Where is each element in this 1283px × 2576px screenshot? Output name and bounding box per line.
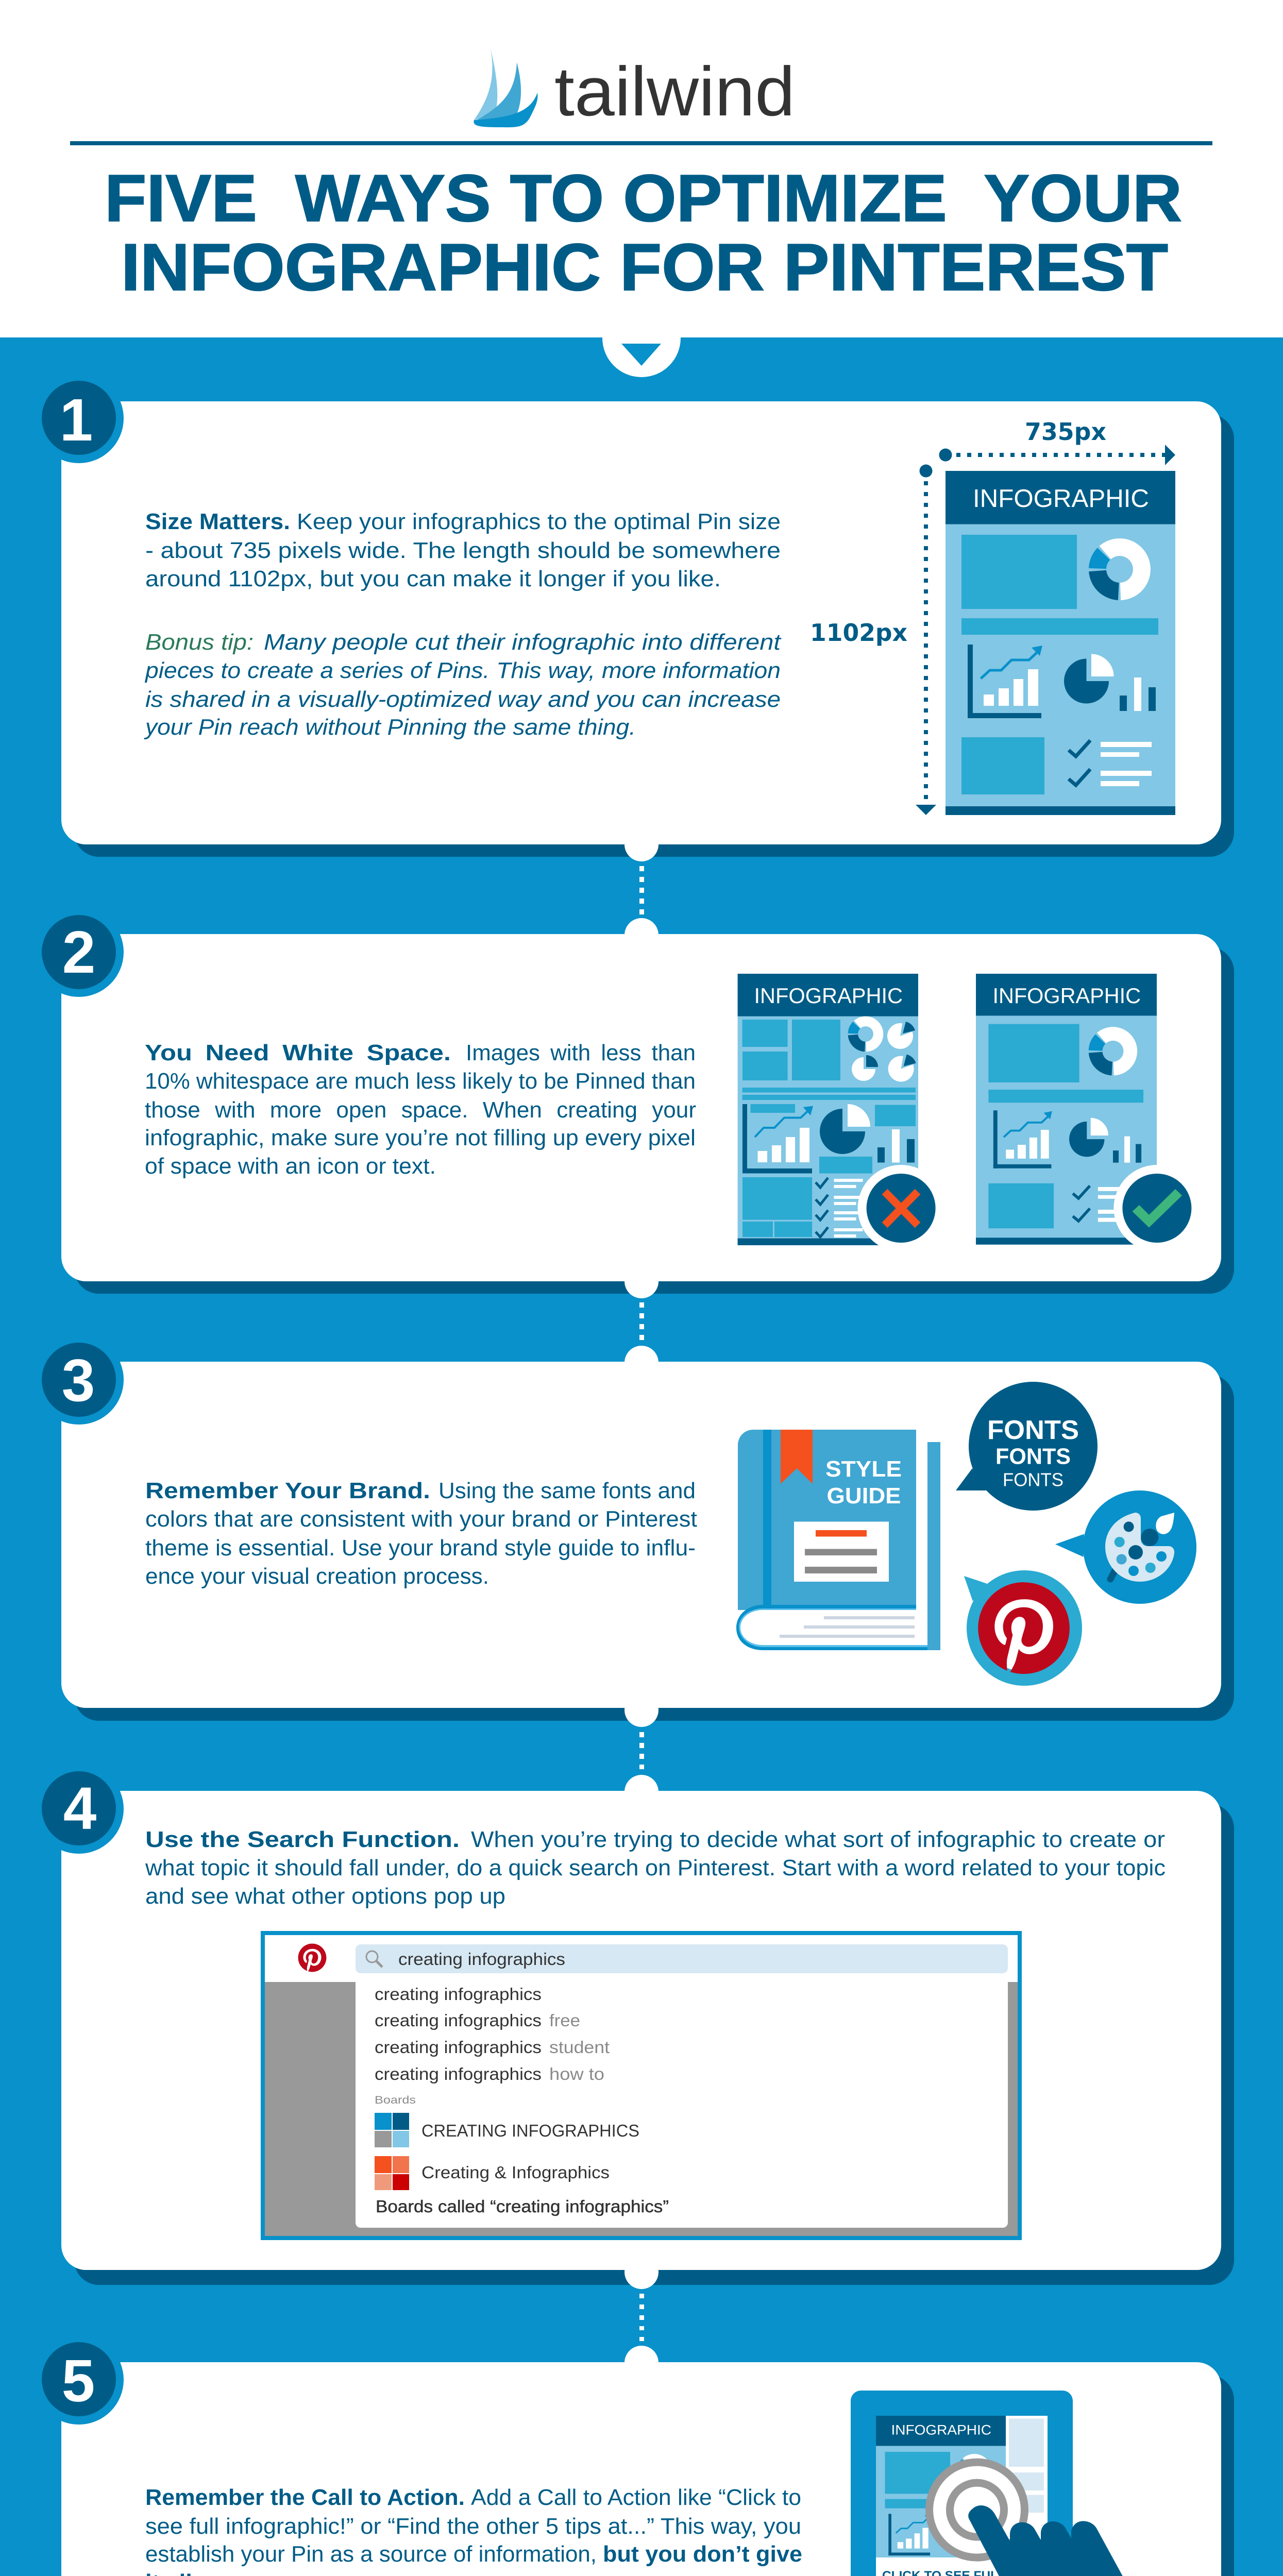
text: size matters: around 1102px, but you can make it longer if you like. [145, 566, 721, 591]
number badge 3: 3 [62, 1347, 95, 1414]
board result: creating infographics: CREATING INFOGRAPHICS [421, 2121, 639, 2140]
search suggestions: free [549, 2011, 580, 2030]
text: call to action: see full infographic!” or “Find the other 5 tips at...” This way, you [145, 2514, 801, 2539]
number badge 2: 2 [62, 919, 95, 986]
text: bonus tip: your Pin reach without Pinning the same thing. [144, 715, 636, 740]
icon: fonts bubble: FONTS [995, 1444, 1071, 1469]
panel: step 2 [34, 907, 1234, 1298]
text: call to action [145, 2485, 802, 2576]
infographic mockup: 735 by 1102: INFOGRAPHIC [973, 485, 1149, 513]
label: 1102px: 1102px [810, 619, 907, 647]
header rule [70, 141, 1212, 145]
text: bonus tip: is shared in a visually-optimized way and you can increase [145, 687, 781, 712]
logo: tailwind [474, 48, 795, 130]
connector dots 2 to 3 [639, 1302, 644, 1340]
board result: creating and infographics: Creating & Infographics [421, 2163, 610, 2182]
text: search function: Use the Search Function. [145, 1827, 460, 1852]
icon: fonts bubble [956, 1382, 1098, 1511]
text: size matters: Keep your infographics to the optimal Pin size [297, 509, 781, 534]
icon: touch rings [930, 2462, 1024, 2557]
board result: creating infographics [375, 2113, 639, 2147]
boards called link: Boards called “creating infographics” [376, 2197, 669, 2216]
text: call to action: but you don’t give [603, 2541, 802, 2567]
panel: step 4 [34, 1764, 1234, 2289]
text: white space: those with more open space. When creating your [145, 1097, 696, 1123]
number badge 4 [34, 1764, 124, 1854]
logo: tailwind: tailwind [554, 53, 795, 130]
chevron badge [602, 299, 681, 377]
number badge 1: 1 [60, 386, 93, 453]
infographic mockup: airy: INFOGRAPHIC [992, 984, 1141, 1008]
icon: pinterest bubble [964, 1570, 1082, 1686]
search bar [356, 1944, 1008, 1973]
icon: style guide book: STYLE [825, 1456, 902, 1482]
icon: tablet: INFOGRAPHIC [891, 2422, 991, 2438]
arrow: height dimension [916, 465, 936, 815]
infographic mockup: airy [976, 974, 1200, 1251]
search suggestions: Boards [375, 2094, 416, 2106]
text: bonus tip: Many people cut their infographic into different [264, 630, 782, 655]
text: size matters [145, 509, 781, 591]
search suggestions: how to [549, 2064, 604, 2083]
text: brand: theme is essential. Use your brand style guide to influ- [145, 1535, 696, 1561]
label: 735px: 735px [1025, 418, 1106, 446]
text: brand: Using the same fonts and [438, 1478, 696, 1503]
screenshot: pinterest search [263, 1933, 1020, 2238]
board result: creating and infographics [375, 2156, 610, 2190]
text: bonus tip [144, 630, 782, 740]
text: brand [145, 1478, 697, 1589]
infographic mockup: 735 by 1102 [946, 471, 1175, 815]
connector dots 1 to 2 [639, 866, 644, 914]
text: search function: and see what other options pop up [145, 1884, 505, 1909]
icon: pinterest logo small [298, 1943, 326, 1972]
panel: step 1 [34, 374, 1234, 861]
search bar: creating infographics [398, 1950, 565, 1969]
title: FIVE WAYS TO OPTIMIZE YOUR [105, 161, 1182, 235]
icon: fonts bubble: FONTS [1003, 1469, 1063, 1490]
infographic mockup: crowded [738, 974, 944, 1251]
number badge 4: 4 [63, 1775, 96, 1842]
icon: green check [1113, 1165, 1200, 1251]
infographic mockup: crowded: INFOGRAPHIC [754, 984, 903, 1008]
search suggestions: creating infographics [375, 2064, 542, 2083]
text: search function [145, 1827, 1166, 1909]
number badge 5 [34, 2335, 124, 2425]
text: bonus tip: pieces to create a series of Pins. This way, more information [144, 658, 781, 683]
text: white space: 10% whitespace are much less likely to be Pinned than [145, 1069, 696, 1094]
search suggestions [375, 1985, 610, 2106]
text: call to action: establish your Pin as a source of information, [145, 2541, 597, 2567]
text: white space: of space with an icon or text. [145, 1154, 436, 1179]
search suggestions: creating infographics [375, 1985, 542, 2004]
text: brand: colors that are consistent with your brand or Pinterest [145, 1506, 697, 1532]
text: call to action: Remember the Call to Action. [145, 2485, 465, 2510]
icon: fonts bubble: FONTS [987, 1415, 1079, 1445]
title [105, 161, 1182, 304]
arrow: width dimension [939, 445, 1175, 465]
number badge 1 [34, 374, 124, 463]
search suggestions: creating infographics [375, 2011, 542, 2030]
icon: palette bubble [1055, 1490, 1196, 1604]
connector dots 3 to 4 [639, 1732, 644, 1769]
icon: style guide book: GUIDE [826, 1483, 901, 1509]
text: bonus tip: Bonus tip: [145, 630, 254, 655]
text: search function: When you’re trying to decide what sort of infographic to create or [471, 1827, 1165, 1852]
connector dots 4 to 5 [639, 2294, 644, 2341]
text: search function: what topic it should fall under, do a quick search on Pinterest. Start with a word related to your topic [145, 1855, 1166, 1880]
icon: style guide book [736, 1430, 940, 1650]
panel: step 3 [34, 1335, 1234, 1727]
number badge 2 [34, 907, 124, 997]
text: white space: You Need White Space. [145, 1040, 451, 1065]
icon: pointing hand [968, 2505, 1151, 2576]
text: size matters: Size Matters. [145, 509, 290, 534]
title: INFOGRAPHIC FOR PINTEREST [121, 230, 1168, 304]
number badge 3 [34, 1335, 124, 1425]
text: brand: Remember Your Brand. [145, 1478, 430, 1503]
icon: tablet [851, 2391, 1151, 2576]
search suggestions: creating infographics [375, 2038, 542, 2057]
text: size matters: - about 735 pixels wide. The length should be somewhere [145, 538, 781, 563]
text: brand: ence your visual creation process. [145, 1564, 489, 1589]
text: white space: Images with less than [466, 1040, 696, 1065]
panel: step 5 [34, 2335, 1234, 2576]
text: white space: infographic, make sure you’re not filling up every pixel [145, 1125, 696, 1150]
number badge 5: 5 [62, 2347, 95, 2414]
text: white space [145, 1040, 696, 1179]
search suggestions: student [549, 2038, 610, 2057]
icon: red cross [858, 1165, 944, 1251]
text: call to action: Add a Call to Action like “Click to [471, 2485, 801, 2510]
